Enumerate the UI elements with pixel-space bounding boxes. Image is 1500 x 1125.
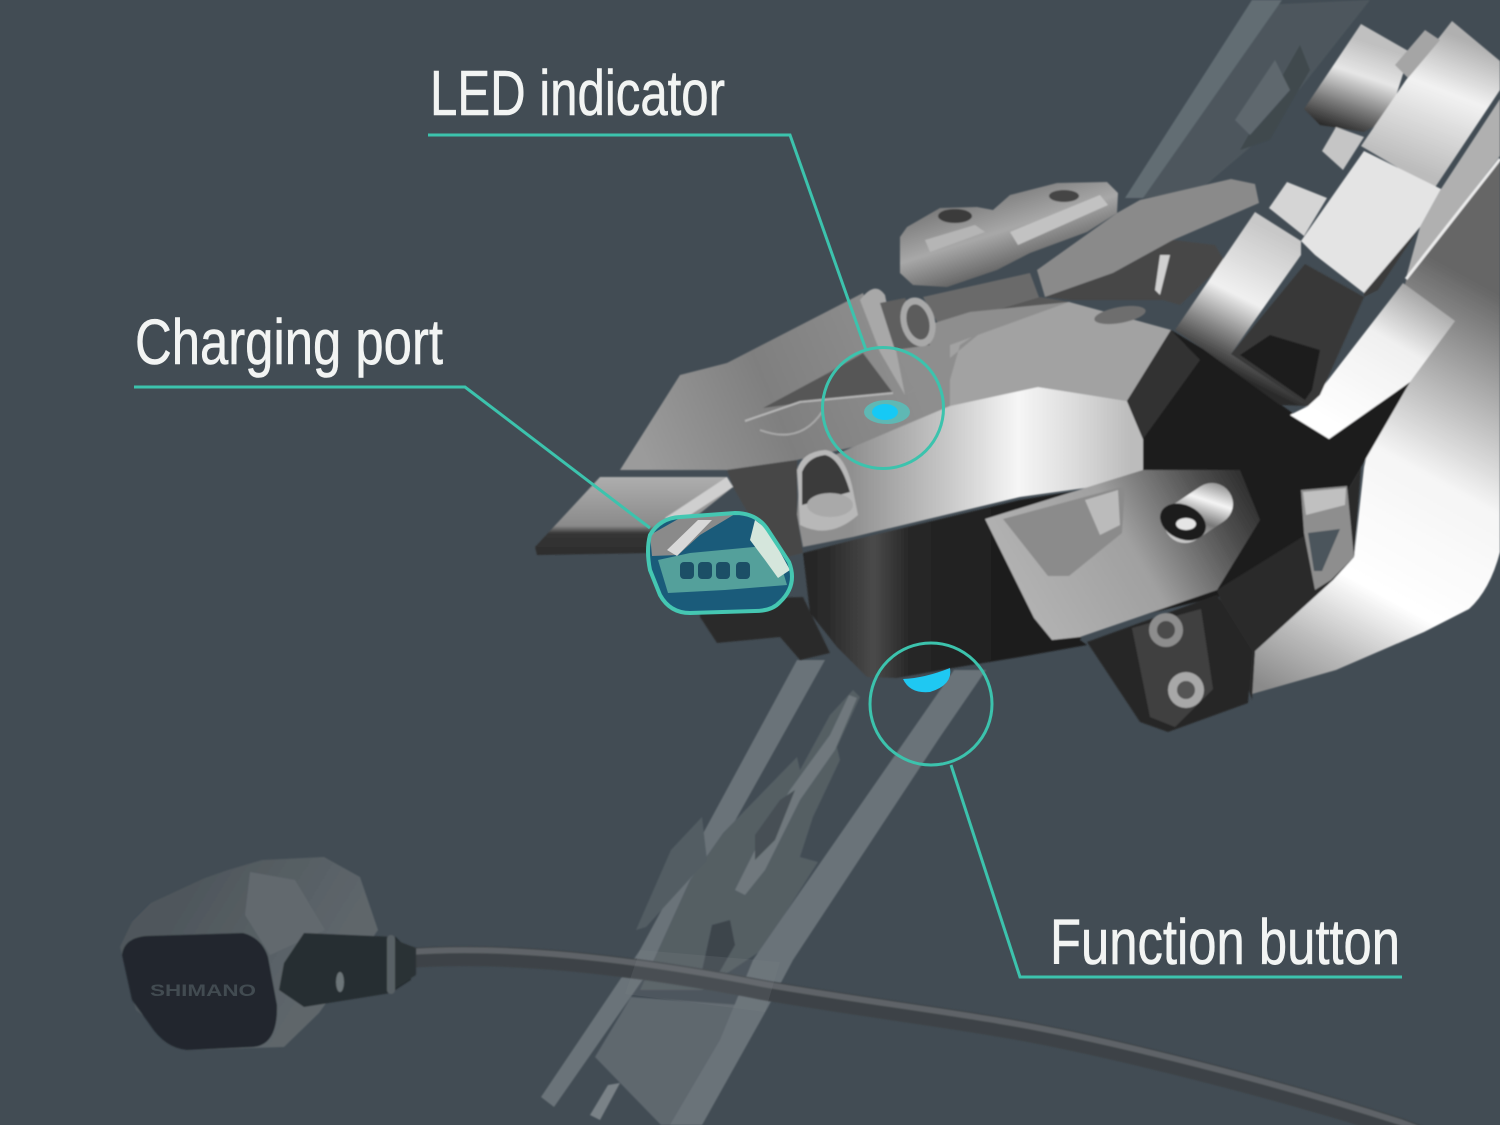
bolt cylinder bbox=[1154, 496, 1212, 548]
callout: charging port bbox=[134, 306, 650, 528]
callout: charging port: Charging port bbox=[135, 306, 443, 378]
top-right block bbox=[1361, 21, 1500, 189]
top-right cylinder bbox=[1304, 24, 1410, 132]
white front sweep bbox=[797, 387, 1143, 547]
upper translucent cassette plates bbox=[1125, 0, 1370, 198]
barrel fitting bbox=[860, 289, 905, 395]
plug face bbox=[122, 933, 277, 1050]
black body bbox=[1000, 330, 1410, 650]
cable bbox=[408, 950, 1440, 1125]
callout: LED indicator: LED indicator bbox=[430, 57, 725, 129]
charging plug bbox=[120, 857, 416, 1050]
lattice bbox=[1301, 486, 1354, 590]
lower translucent plates and pulley bbox=[541, 660, 986, 1125]
white upper arm bbox=[1175, 212, 1308, 406]
function button bbox=[903, 668, 950, 692]
plug logo: SHIMANO bbox=[150, 981, 256, 1000]
link arm rear bbox=[1037, 179, 1259, 297]
plug connector bbox=[279, 933, 411, 1007]
plate: bottom bulge bbox=[595, 997, 768, 1125]
white lower arm bbox=[1252, 160, 1500, 694]
callout: LED indicator bbox=[428, 57, 944, 468]
lower grey plate bbox=[985, 470, 1260, 640]
LED recess bbox=[763, 353, 893, 408]
fin bbox=[535, 477, 733, 555]
bolt recess bbox=[797, 450, 858, 531]
dark window bbox=[1231, 264, 1364, 406]
wedge behind fin bbox=[727, 460, 803, 560]
callout: function button: Function button bbox=[1050, 906, 1400, 978]
lower bracket bbox=[1087, 595, 1252, 732]
LED indicator dot bbox=[864, 400, 910, 424]
plate: pulley bbox=[640, 690, 860, 990]
overlay of plate across cable bbox=[625, 950, 780, 1012]
link arm front bbox=[900, 182, 1118, 287]
small cubes bbox=[1322, 127, 1364, 170]
plug body bbox=[120, 857, 378, 1050]
plate: right band bbox=[670, 670, 986, 1125]
top plate bbox=[620, 293, 1171, 470]
link under ring bbox=[923, 273, 1040, 327]
charging port highlight bbox=[648, 513, 792, 613]
derailleur bbox=[535, 21, 1500, 732]
mid block bbox=[1301, 151, 1441, 293]
plate: left band bbox=[541, 660, 825, 1107]
callout: function button bbox=[870, 643, 1402, 978]
dark housing bbox=[803, 480, 1143, 678]
dark gap below arm bbox=[1217, 467, 1361, 700]
